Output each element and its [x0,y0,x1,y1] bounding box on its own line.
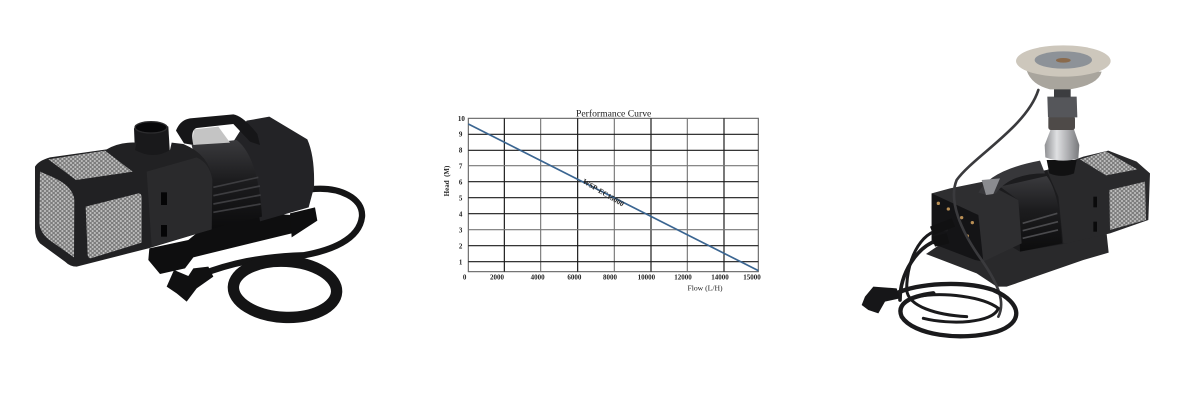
motor [1000,176,1062,252]
side mesh [1109,182,1146,230]
thin lamp cable [954,90,1038,317]
y axis labels: 10 [458,115,465,123]
top mesh [1080,151,1137,175]
base [926,234,1109,287]
y axis labels: 7 [459,163,463,171]
top mesh [48,151,133,180]
line label: WSP-EC15000 [581,177,626,209]
x axis labels: 8000 [603,274,617,282]
plug connector [167,267,213,302]
performance line [468,124,758,271]
product photo: pump with fountain nozzle [862,45,1150,336]
y axis labels: 1 [459,259,463,267]
y axis title: Head (M) [443,165,451,196]
carry handle [978,161,1045,195]
y axis labels: 6 [459,179,463,187]
mounting base [148,207,317,274]
x axis labels: 0 [463,274,467,282]
x axis labels: 14000 [711,274,729,282]
outlet socket [134,122,170,158]
x axis labels: 10000 [638,274,656,282]
performance curve chart [443,108,761,293]
fountain plate [1016,45,1111,89]
y axis labels [458,115,465,267]
housing shading [147,157,212,247]
y axis labels: 5 [459,195,463,203]
silver coupling [1045,129,1079,161]
x axis labels: 2000 [490,274,504,282]
front housing [1047,151,1150,244]
carry handle [176,114,260,145]
end mesh [39,172,74,257]
cable glands [930,218,955,247]
controller box [932,182,1022,262]
product photo: pump with coiled cable [35,114,362,320]
plug connector [862,287,900,313]
chart title: Performance Curve [576,108,651,119]
side mesh [86,193,142,258]
x axis labels: 4000 [531,274,545,282]
neck [1047,160,1077,176]
rear housing [233,117,314,221]
y axis labels: 2 [459,243,463,251]
y axis labels: 9 [459,131,463,139]
y axis labels: 4 [459,211,463,219]
x axis labels: 15000 [743,274,761,282]
x axis labels: 6000 [567,274,582,282]
clip slots [161,192,167,237]
power cable coil [897,230,1016,336]
x axis labels: 12000 [674,274,692,282]
x axis labels [463,274,761,282]
clip slots [1093,197,1097,232]
grid [468,118,758,272]
threaded fitting [1047,87,1077,130]
motor [192,140,262,229]
power cable and coil [200,189,362,320]
front housing [35,143,212,267]
y axis labels: 3 [459,227,463,235]
rear body fill [983,170,1067,252]
y axis labels: 8 [459,147,463,155]
x axis title: Flow (L/H) [687,284,723,293]
